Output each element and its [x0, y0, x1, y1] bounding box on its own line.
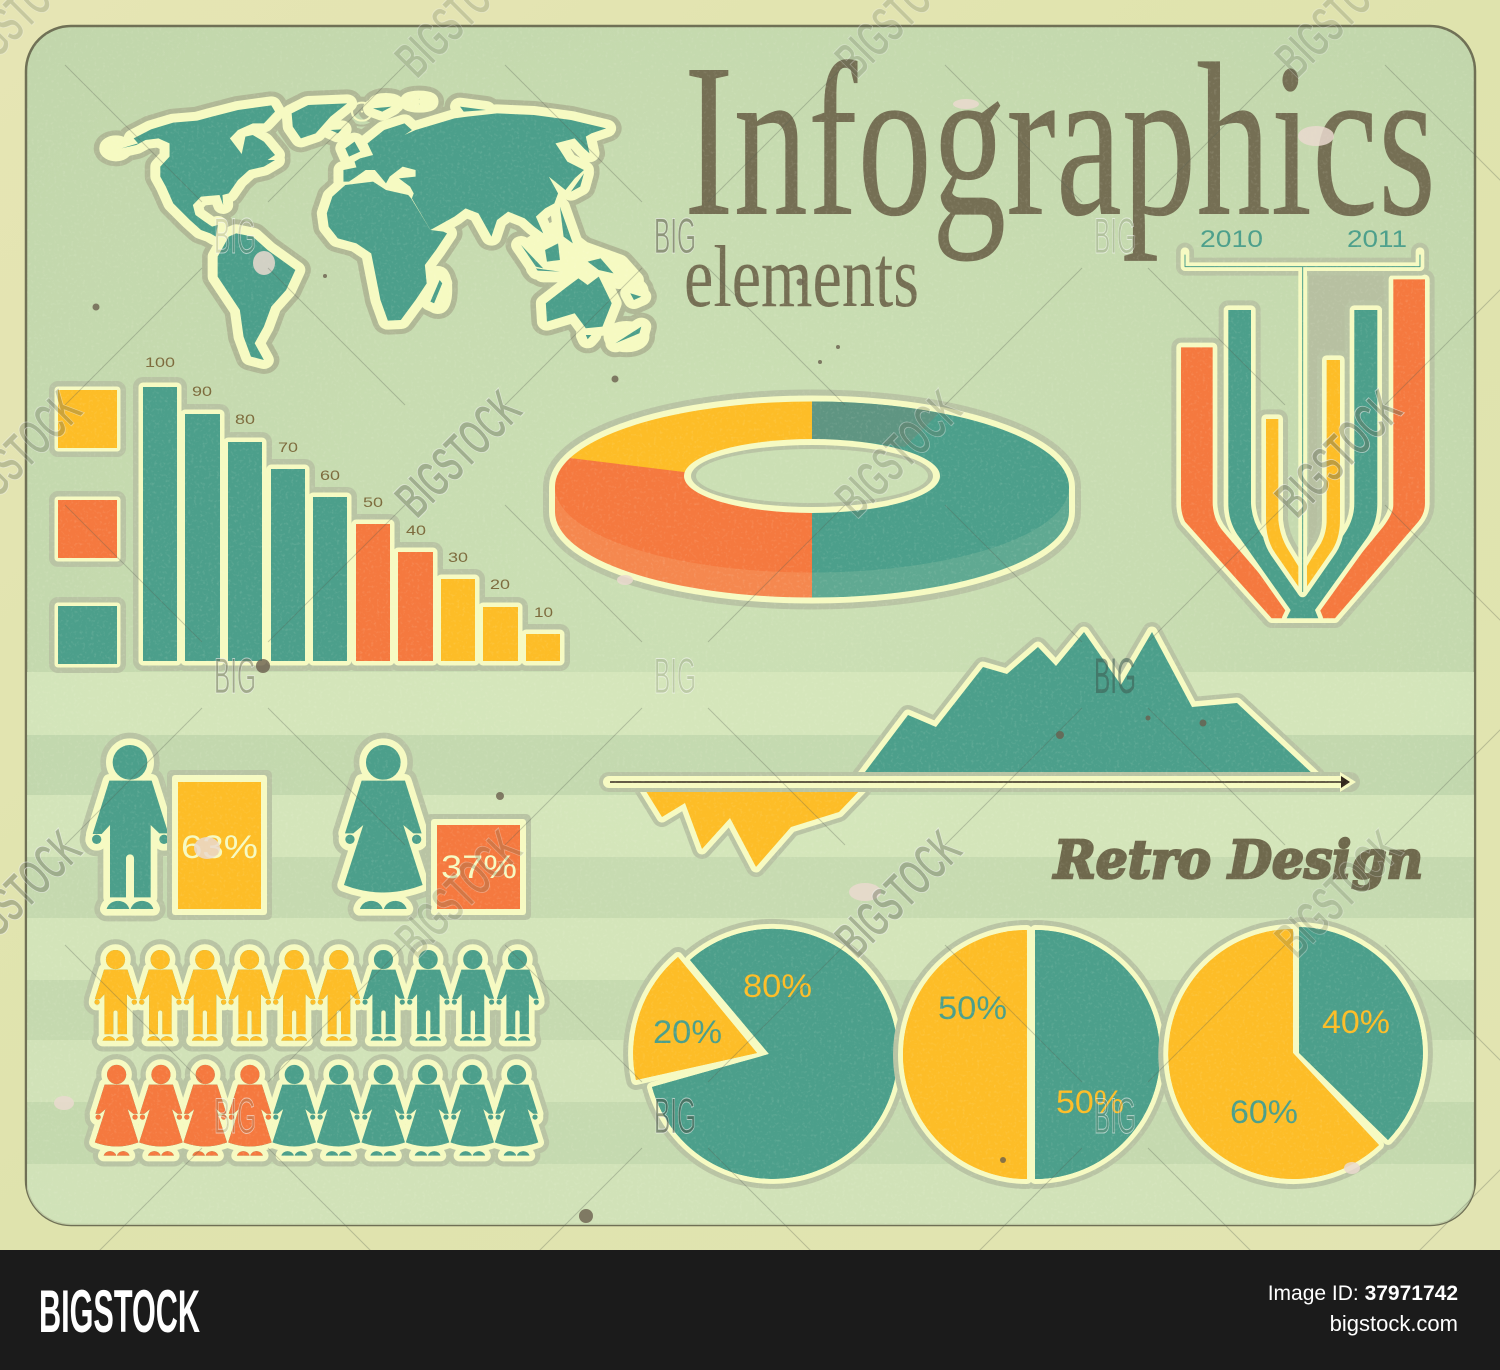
bars	[143, 387, 560, 661]
stains and specks	[54, 99, 1360, 1223]
bar value labels: 100	[145, 354, 175, 370]
text: BIG	[1094, 208, 1136, 264]
large woman icon	[344, 745, 423, 909]
watermark: BIGSTOCK diagonal text: BIGSTOCK	[1264, 820, 1413, 968]
watermark: BIG text: BIG	[214, 1088, 256, 1144]
watermark: BIG text: BIG	[214, 208, 256, 264]
branching bars	[1181, 279, 1425, 618]
bar value labels: 40	[406, 522, 426, 538]
watermark: BIGSTOCK diagonal text	[0, 0, 1413, 968]
footer image id: Image ID: 37971742	[1268, 1282, 1458, 1305]
bar value labels: 70	[278, 439, 298, 455]
area shapes	[644, 632, 1315, 867]
axis arrow	[609, 772, 1356, 792]
bar value labels: 60	[320, 467, 340, 483]
pie chart 50 / 50: 50%	[1056, 1084, 1124, 1120]
watermark: BIGSTOCK diagonal text: BIGSTOCK	[1264, 380, 1413, 528]
large man icon	[92, 745, 169, 909]
pie chart 50 / 50	[903, 930, 1160, 1179]
watermark: BIG text: BIG	[654, 208, 696, 264]
year labels	[1200, 226, 1407, 253]
donut segment: orange	[555, 458, 812, 598]
text: BIG	[1094, 1088, 1136, 1144]
people row: men	[94, 950, 539, 1041]
area chart with arrow axis	[609, 632, 1356, 867]
bar value labels: 10	[534, 604, 553, 620]
pie chart 40 / 60: 60%	[1230, 1094, 1298, 1130]
branching bar chart 2010 / 2011	[1181, 252, 1425, 618]
text: BIG	[1094, 648, 1136, 704]
63 percent box	[167, 770, 272, 920]
watermark: BIG text	[214, 208, 1136, 1144]
pie chart 20 / 80: 80%	[743, 968, 812, 1004]
bar value labels: 90	[192, 383, 212, 399]
watermark: BIG text: BIG	[654, 1088, 696, 1144]
year labels: 2010	[1200, 226, 1263, 253]
subtitle: elements: elements	[684, 229, 919, 326]
watermark: BIGSTOCK diagonal text: BIGSTOCK	[824, 380, 973, 528]
shaded area	[1308, 273, 1390, 567]
heading: Retro Design: Retro Design	[1052, 830, 1423, 891]
bar value labels: 30	[448, 549, 468, 565]
63 percent box: 63%	[181, 829, 258, 865]
37 percent box: 37%	[441, 849, 517, 885]
donut segment: yellow	[570, 401, 812, 477]
pie chart 40 / 60: 40%	[1322, 1004, 1390, 1040]
donut hole	[684, 439, 940, 513]
donut segment: dark top	[812, 402, 939, 447]
watermark: BIGSTOCK diagonal text: BIGSTOCK	[384, 820, 533, 968]
year labels: 2011	[1347, 226, 1407, 253]
pie chart 20 / 80: 20%	[653, 1014, 722, 1050]
bar value labels: 50	[363, 494, 383, 510]
watermark: BIGSTOCK diagonal text: BIGSTOCK	[384, 380, 533, 528]
bracket and stem	[1185, 252, 1420, 592]
bar chart with legend	[58, 354, 560, 664]
watermark: BIGSTOCK diagonal text: BIGSTOCK	[824, 820, 973, 968]
bar value labels	[145, 354, 553, 620]
37 percent box	[426, 814, 531, 920]
world map	[109, 100, 641, 360]
donut front wall highlight	[555, 487, 1069, 598]
donut chart	[555, 401, 1069, 598]
pie chart 50 / 50: 50%	[938, 990, 1007, 1026]
bar value labels: 20	[490, 576, 510, 592]
watermark: BIG text: BIG	[214, 648, 256, 704]
watermark: BIG text: BIG	[654, 648, 696, 704]
footer site: bigstock.com	[1330, 1311, 1458, 1336]
pie chart 20 / 80	[633, 929, 898, 1179]
people row: women	[95, 1065, 538, 1156]
footer logo: BIGSTOCK	[39, 1278, 200, 1345]
legend squares	[58, 390, 117, 664]
donut segment: teal	[812, 402, 1069, 598]
pie chart 40 / 60	[1168, 927, 1423, 1179]
footer bar	[0, 1250, 1500, 1370]
bar value labels: 80	[235, 411, 255, 427]
